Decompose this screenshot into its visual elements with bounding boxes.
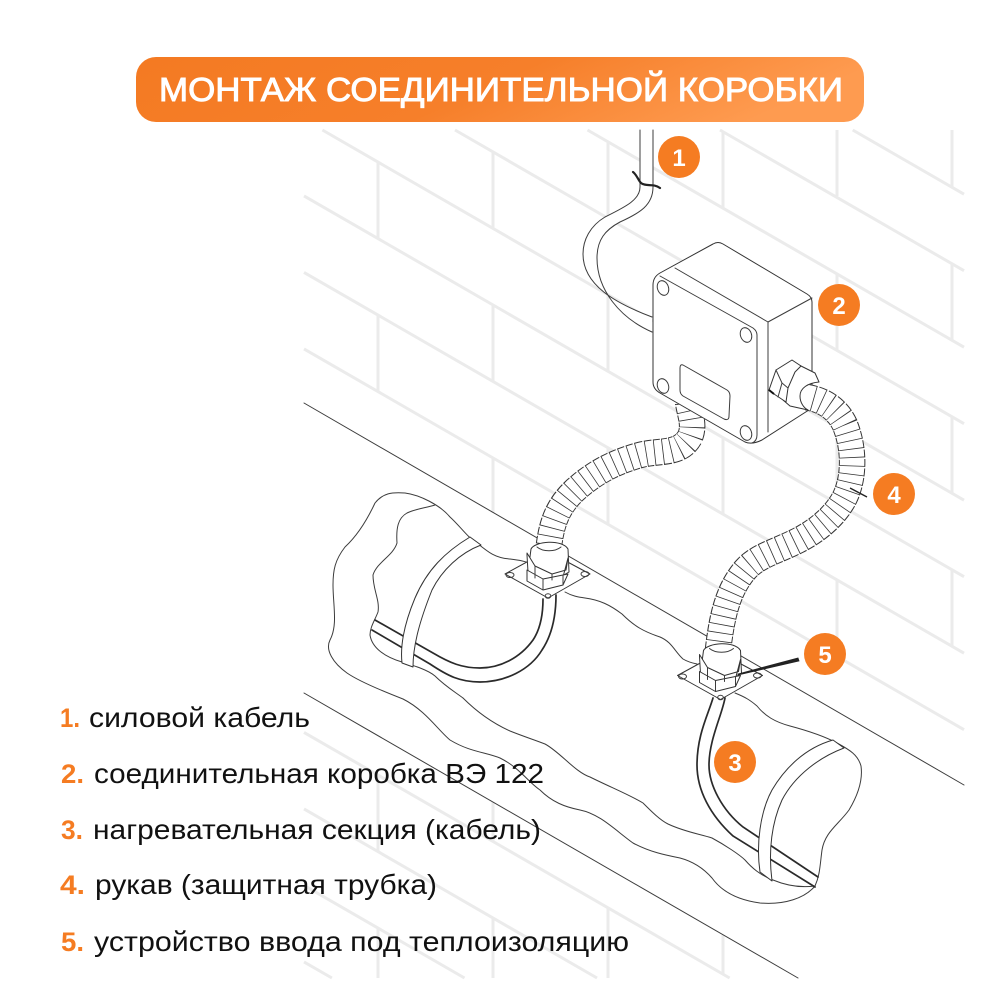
fixing band left — [402, 537, 481, 667]
legend item 1: 1. — [60, 703, 80, 733]
mounting plate with gland left — [505, 542, 590, 598]
legend item 1: силовой кабель — [89, 702, 310, 733]
corrugated sleeve right — [718, 397, 852, 650]
callout 5: 5 — [818, 642, 832, 669]
brick wall background — [304, 130, 964, 978]
callout 2: 2 — [832, 293, 846, 320]
callout 4: 4 — [887, 482, 901, 509]
callout 4 — [873, 473, 915, 515]
title banner: МОНТАЖ СОЕДИНИТЕЛЬНОЙ КОРОБКИ — [159, 71, 843, 108]
leader line to callout 5 — [738, 658, 799, 675]
legend item 2: соединительная коробка ВЭ 122 — [94, 758, 544, 789]
heating cable left — [372, 595, 556, 682]
legend item 4: рукав (защитная трубка) — [95, 869, 437, 900]
legend item 5: устройство ввода под теплоизоляцию — [94, 926, 629, 957]
legend — [60, 702, 629, 957]
thermal insulation left segment — [329, 493, 533, 699]
callout 1 — [658, 136, 700, 178]
thermal insulation right segment — [565, 592, 861, 886]
callout 5 — [804, 633, 846, 675]
cable gland on box — [769, 360, 819, 410]
callout 3: 3 — [728, 750, 742, 777]
pipe wall lines — [304, 403, 964, 978]
legend item 5: 5. — [61, 927, 84, 957]
callout 1: 1 — [672, 145, 686, 172]
thermal insulation long lower edges — [403, 698, 815, 903]
corrugated sleeve left — [549, 402, 692, 545]
heating cable right — [697, 698, 818, 887]
mounting plate with gland right — [678, 644, 762, 700]
callout 2 — [818, 284, 860, 326]
junction box — [653, 242, 812, 443]
legend item 4: 4. — [60, 870, 85, 900]
legend item 2: 2. — [61, 759, 84, 789]
legend item 3: 3. — [61, 815, 83, 845]
fixing band right — [758, 740, 844, 881]
callout 3 — [714, 741, 756, 783]
power cable 1 — [583, 130, 660, 332]
legend item 3: нагревательная секция (кабель) — [93, 814, 541, 845]
leader line to callout 4 — [850, 488, 867, 497]
title banner — [136, 57, 864, 122]
